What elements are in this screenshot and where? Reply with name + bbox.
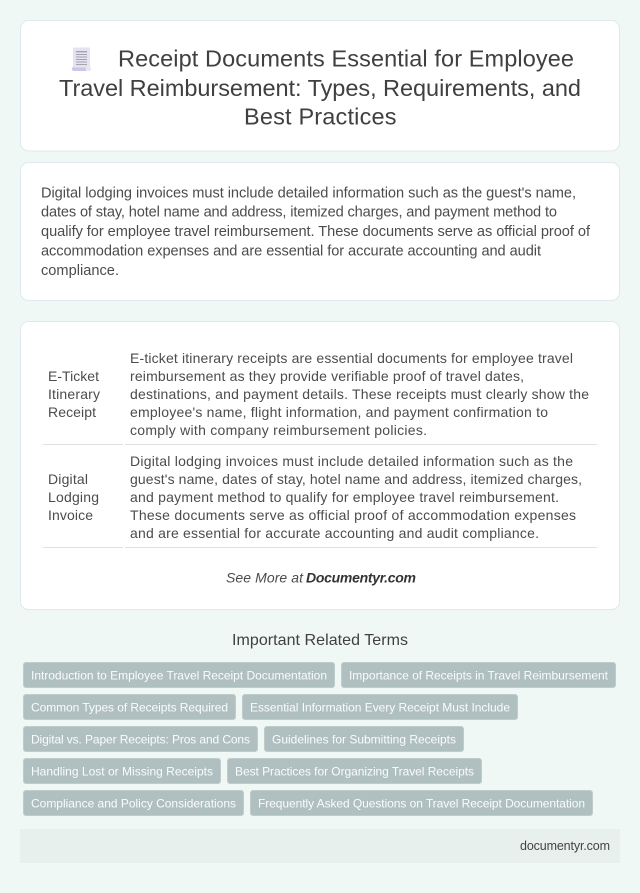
panel: intro text	[20, 162, 620, 300]
row text: digital lodging description: guest's name, dates of stay, hotel name and address, itemized charges,	[130, 471, 582, 487]
chip: digital vs paper	[24, 726, 258, 752]
chip: lost receipts	[24, 758, 220, 784]
text block: intro paragraph	[41, 186, 591, 279]
chip: guidelines: Guidelines for Submitting Receipts	[272, 732, 456, 746]
row text: digital lodging description	[130, 453, 582, 541]
table row: digital lodging invoice	[48, 453, 582, 541]
link: see more: Documentyr.com	[306, 570, 416, 586]
chip: faq	[250, 790, 592, 816]
chip: common types	[24, 694, 236, 720]
icon: receipt	[72, 48, 91, 71]
row label: e-ticket: Receipt	[48, 404, 96, 420]
chip: best practices: Best Practices for Organizing Travel Receipts	[235, 764, 474, 778]
chip: essential information: Essential Information Every Receipt Must Include	[250, 700, 510, 714]
link: see more: See More at	[226, 570, 304, 586]
chip: compliance	[24, 790, 244, 816]
row text: digital lodging description: and payment method to qualify for employee travel reimbursement.	[130, 489, 559, 505]
row text: e-ticket description	[130, 350, 589, 438]
text block: intro paragraph: accommodation expenses and are essential for accurate accounting and audit	[41, 244, 541, 260]
heading: title: Receipt Documents Essential for Employee	[118, 46, 574, 72]
row text: e-ticket description: destinations, and payment details. These receipts must clearly show the	[130, 386, 589, 402]
chip: digital vs paper: Digital vs. Paper Receipts: Pros and Cons	[31, 732, 250, 746]
heading: title: Travel Reimbursement: Types, Requirements, and	[59, 75, 581, 101]
row label: digital lodging: Digital	[48, 471, 88, 487]
row text: digital lodging description: Digital lodging invoices must include detailed information such as the	[130, 453, 573, 469]
panel: receipt types table	[20, 322, 620, 610]
panel: related term chips	[24, 662, 616, 816]
chip: importance: Importance of Receipts in Travel Reimbursement	[349, 668, 609, 682]
chip: essential information	[242, 694, 518, 720]
row text: digital lodging description: and are essential for accurate accounting and audit compliance.	[130, 525, 539, 541]
text block: intro paragraph: qualify for employee travel reimbursement. These documents serve as official proof of	[41, 224, 591, 240]
row label: digital lodging: Lodging	[48, 489, 99, 505]
panel: title card	[20, 20, 620, 151]
heading: title: Best Practices	[244, 104, 396, 130]
heading: important related terms: Important Related Terms	[232, 632, 408, 649]
chip: best practices	[228, 758, 482, 784]
row text: e-ticket description: reimbursement as they provide verifiable proof of travel dates,	[130, 368, 524, 384]
heading: title	[59, 46, 581, 130]
row label: e-ticket	[48, 368, 100, 420]
text block: intro paragraph: compliance.	[41, 263, 119, 279]
row text: e-ticket description: employee's name, flight information, and payment confirmation to	[130, 404, 548, 420]
footer	[20, 829, 620, 863]
text block: intro paragraph: dates of stay, hotel name and address, itemized charges, and payment method to	[41, 204, 557, 220]
chip: guidelines	[264, 726, 464, 752]
row text: e-ticket description: E-ticket itinerary receipts are essential documents for employee travel	[130, 350, 573, 366]
table row: e-ticket itinerary receipt	[48, 350, 589, 438]
text block: intro paragraph: Digital lodging invoices must include detailed information such as the guest's name,	[41, 186, 576, 202]
chip: introduction: Introduction to Employee Travel Receipt Documentation	[31, 668, 327, 682]
chip: faq: Frequently Asked Questions on Travel Receipt Documentation	[258, 796, 585, 810]
row label: digital lodging: Invoice	[48, 507, 93, 523]
row label: digital lodging	[48, 471, 99, 523]
row text: e-ticket description: comply with company reimbursement policies.	[130, 422, 427, 438]
row text: digital lodging description: These documents serve as official proof of accommodation expenses	[130, 507, 576, 523]
link: see more	[226, 570, 416, 586]
chip: introduction	[24, 662, 334, 688]
chip: compliance: Compliance and Policy Considerations	[31, 796, 236, 810]
chip: importance	[342, 662, 616, 688]
chip: lost receipts: Handling Lost or Missing Receipts	[31, 764, 213, 778]
chip: common types: Common Types of Receipts Required	[31, 700, 228, 714]
footer: documentyr.com	[520, 839, 610, 853]
row label: e-ticket: E-Ticket	[48, 368, 99, 384]
row label: e-ticket: Itinerary	[48, 386, 100, 402]
